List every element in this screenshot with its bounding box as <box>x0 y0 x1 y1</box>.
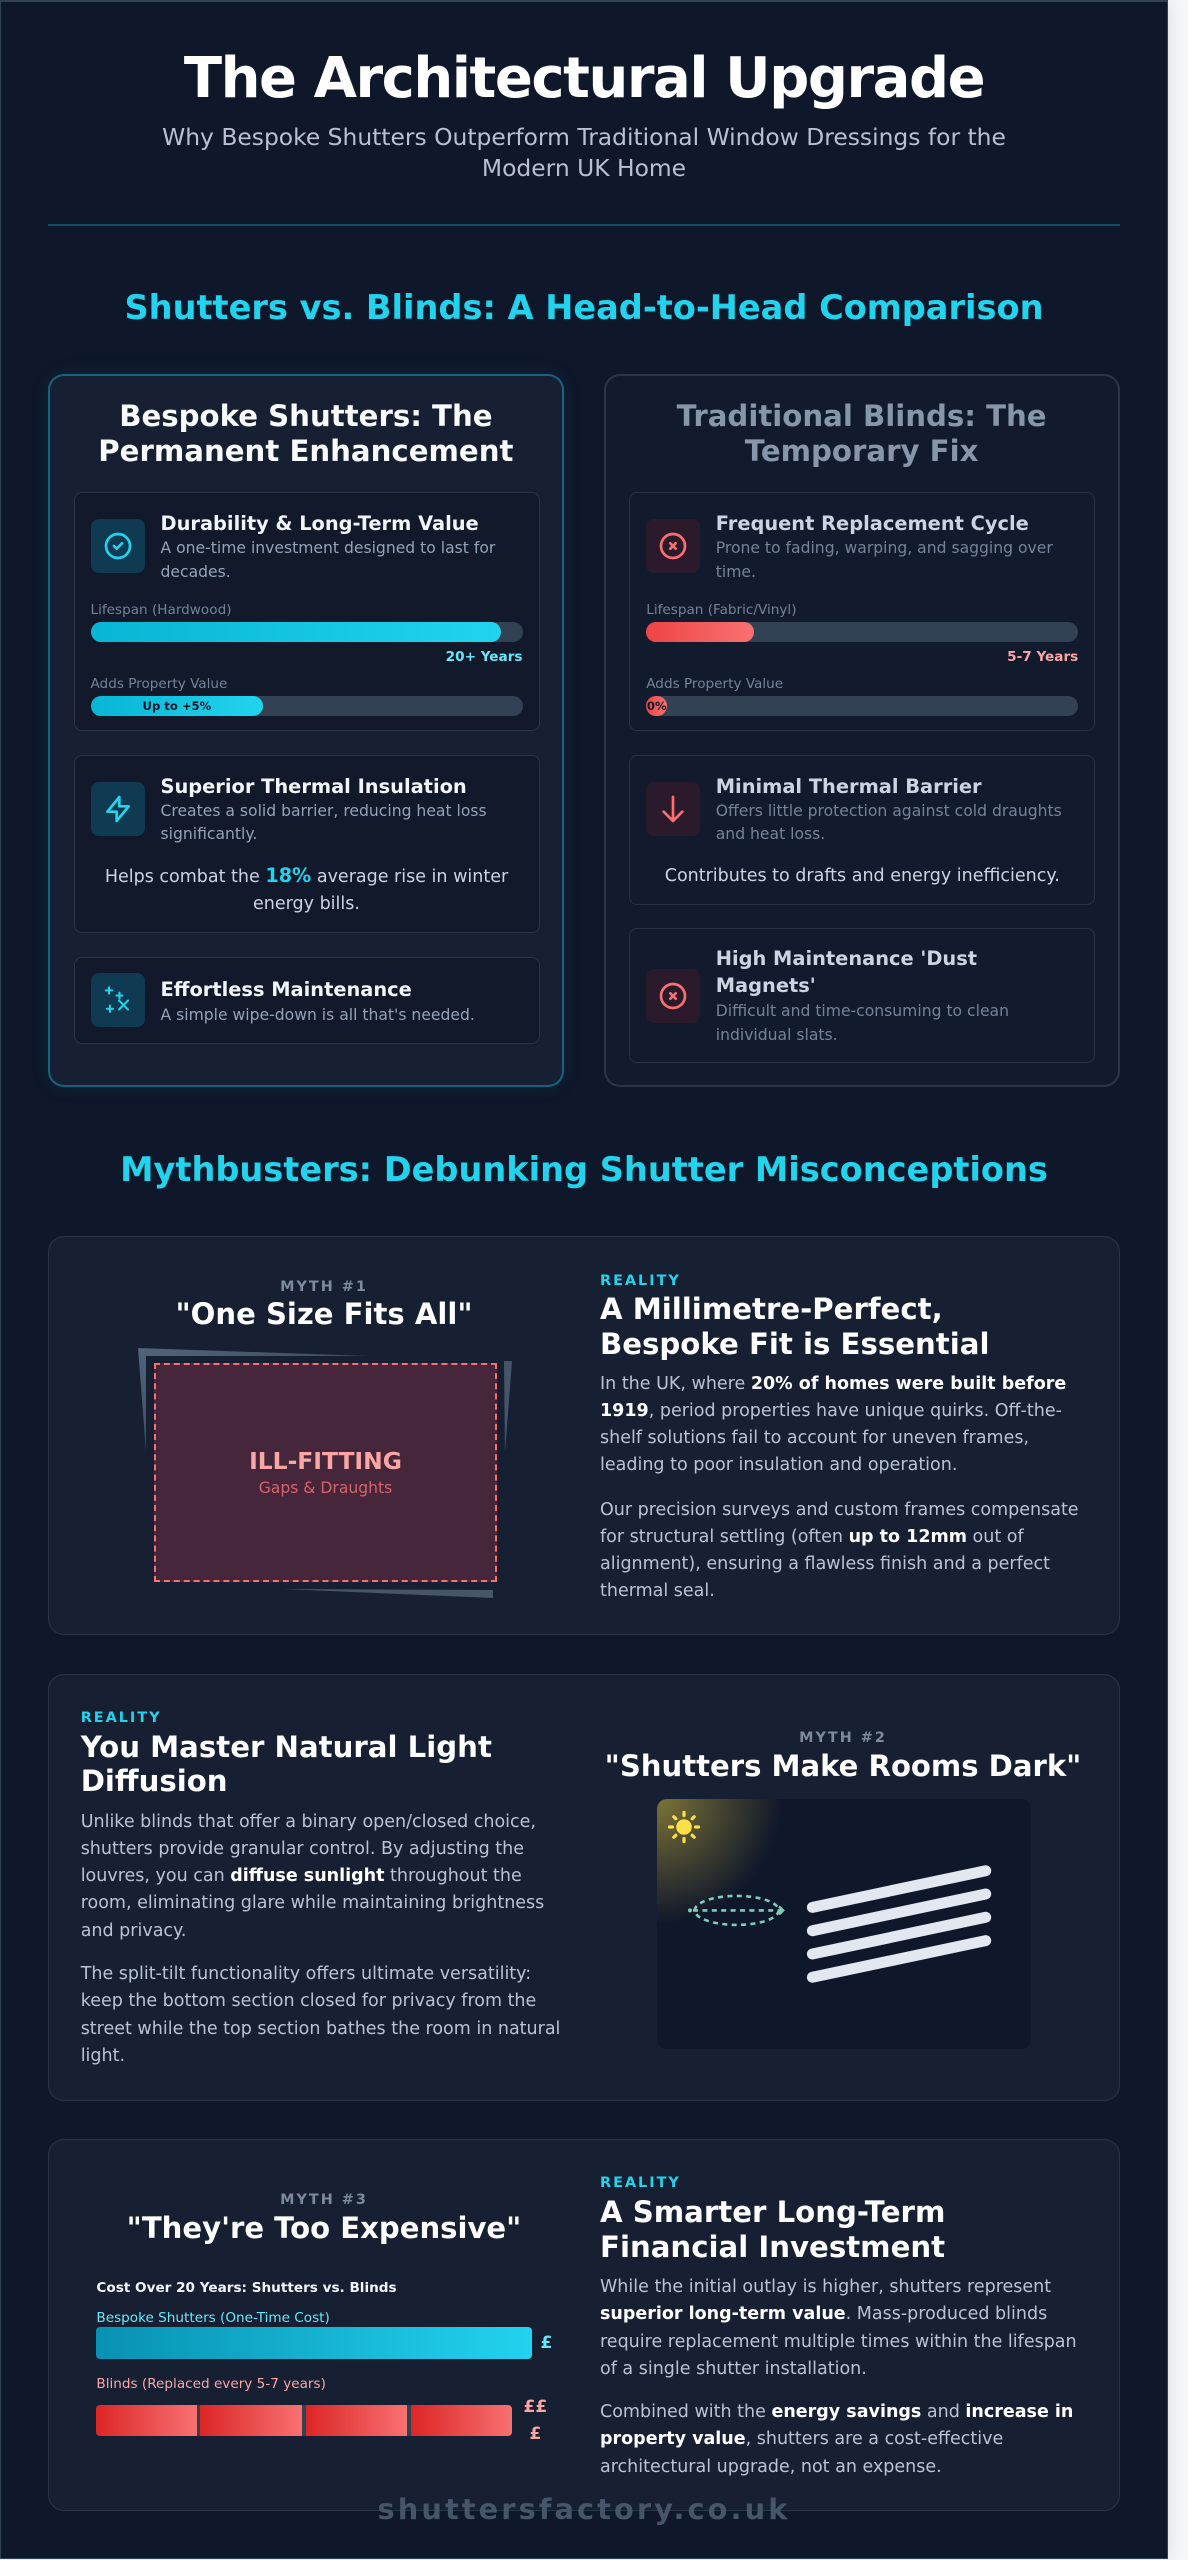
feature title: Magnets' <box>716 974 816 996</box>
panel: myth 2 <box>48 1674 1120 2101</box>
feature: high maintenance <box>629 928 1095 1063</box>
feature title <box>716 946 977 996</box>
panel heading: Temporary Fix <box>745 434 978 468</box>
paragraph: alignment), ensuring a flawless finish and a perfect <box>600 1554 1050 1574</box>
myth label: MYTH #2 <box>799 1730 887 1746</box>
bar: lifespan 25% <box>646 622 1078 642</box>
icon: x circle <box>646 969 700 1023</box>
heading: mythbusters section: Mythbusters: Debunking Shutter Misconceptions <box>120 1150 1048 1189</box>
feature description: individual slats. <box>716 1026 838 1044</box>
feature: thermal insulation <box>74 755 540 933</box>
paragraph: shelf solutions fail to account for uneven frames, <box>600 1428 1029 1448</box>
label: property value: Adds Property Value <box>646 676 783 692</box>
label: lifespan: Lifespan (Hardwood) <box>90 602 232 618</box>
feature description <box>716 802 1062 843</box>
paragraph: Unlike blinds that offer a binary open/closed choice, <box>81 1812 536 1832</box>
statement: Contributes to drafts and energy inefficiency. <box>665 866 1060 886</box>
feature description <box>160 802 487 843</box>
reality heading <box>80 1730 492 1798</box>
paragraph <box>600 2277 1077 2379</box>
myth heading <box>175 1278 472 1330</box>
reality heading: You Master Natural Light <box>81 1730 492 1764</box>
louvres <box>813 1871 986 1977</box>
feature description: Prone to fading, warping, and sagging over <box>716 539 1053 557</box>
feature description: time. <box>716 562 756 580</box>
feature title: Effortless Maintenance <box>160 978 412 1000</box>
paragraph <box>600 1374 1066 1475</box>
myth column <box>605 1730 1081 2049</box>
feature title: Minimal Thermal Barrier <box>716 775 982 798</box>
panel heading <box>98 399 513 468</box>
light rays <box>688 1896 783 1925</box>
label: gaps and draughts: Gaps & Draughts <box>259 1478 392 1496</box>
value: blinds cost: ££ <box>524 2396 547 2416</box>
reality text <box>600 2175 1077 2477</box>
paragraph: light. <box>81 2046 125 2066</box>
icon: lightning bolt <box>90 782 144 836</box>
reality heading: Bespoke Fit is Essential <box>600 1326 989 1360</box>
panel: traditional blinds <box>604 374 1120 1087</box>
bar: lifespan 95% <box>90 622 522 642</box>
icon: arrow down <box>646 782 700 836</box>
panel: myth 3 <box>48 2138 1120 2511</box>
reality heading: Diffusion <box>81 1764 228 1798</box>
feature description: A one-time investment designed to last for <box>160 539 495 557</box>
paragraph: for structural settling (often up to 12mm out of <box>600 1527 1024 1547</box>
feature description: and heat loss. <box>716 825 825 843</box>
icon: x circle <box>646 519 700 573</box>
paragraph: leading to poor insulation and operation. <box>600 1455 957 1475</box>
reality label: REALITY <box>81 1710 162 1726</box>
paragraph: shutters provide granular control. By adjusting the <box>81 1839 524 1859</box>
paragraph: In the UK, where 20% of homes were built before <box>600 1374 1066 1394</box>
paragraph: thermal seal. <box>600 1581 715 1601</box>
panel heading <box>676 399 1047 468</box>
reality label: REALITY <box>600 2175 681 2191</box>
paragraph: of a single shutter installation. <box>600 2359 867 2379</box>
statement <box>105 864 508 914</box>
paragraph: louvres, you can diffuse sunlight throughout the <box>81 1866 522 1886</box>
feature: durability <box>74 492 540 731</box>
paragraph <box>600 2402 1073 2477</box>
reality heading: Financial Investment <box>600 2230 945 2264</box>
feature: replacement cycle <box>629 492 1095 731</box>
feature title: Durability & Long-Term Value <box>160 512 479 534</box>
feature title: High Maintenance 'Dust <box>716 946 977 970</box>
feature description <box>716 1002 1009 1044</box>
bar: blinds in four segments <box>96 2405 512 2436</box>
value: 5-7 years: 5-7 Years <box>1007 648 1078 664</box>
feature description: A simple wipe-down is all that's needed. <box>160 1006 475 1024</box>
paragraph: The split-tilt functionality offers ultimate versatility: <box>81 1964 531 1984</box>
paragraph <box>600 1500 1079 1601</box>
panel: bespoke shutters <box>48 374 564 1087</box>
bar label: shutters: Bespoke Shutters (One-Time Cost) <box>96 2310 330 2326</box>
paragraph: superior long-term value. Mass-produced blinds <box>600 2304 1047 2324</box>
myth label: MYTH #1 <box>280 1278 368 1294</box>
paragraph <box>81 1812 544 1941</box>
feature description <box>160 539 496 580</box>
bar: shutters <box>96 2327 532 2359</box>
feature description <box>716 539 1053 580</box>
reality text <box>600 1272 1079 1601</box>
statement: Helps combat the 18% average rise in winter <box>105 864 508 887</box>
value: blinds cost <box>524 2396 547 2444</box>
myth label: MYTH #3 <box>280 2192 368 2208</box>
icon: sun <box>670 1812 699 1842</box>
subtitle: Modern UK Home <box>482 154 686 182</box>
feature description: Difficult and time-consuming to clean <box>716 1002 1009 1020</box>
icon: sparkles <box>90 973 144 1027</box>
paragraph: and privacy. <box>81 1921 186 1941</box>
paragraph: room, eliminating glare while maintaining brightness <box>81 1893 544 1913</box>
reality heading: A Millimetre-Perfect, <box>600 1292 943 1326</box>
myth quote: "They're Too Expensive" <box>127 2211 521 2245</box>
heading: comparison section: Shutters vs. Blinds: A Head-to-Head Comparison <box>124 288 1044 327</box>
paragraph <box>80 1964 560 2066</box>
reality text <box>80 1710 560 2066</box>
panel heading: Bespoke Shutters: The <box>119 399 493 433</box>
ill-fitting blind <box>154 1363 497 1582</box>
paragraph: While the initial outlay is higher, shutters represent <box>600 2277 1051 2297</box>
illustration: light through louvres <box>657 1799 1031 2049</box>
reality heading <box>600 1292 989 1360</box>
paragraph: property value, shutters are a cost-effective <box>600 2429 1003 2449</box>
chart title: Cost Over 20 Years: Shutters vs. Blinds <box>96 2280 397 2296</box>
panel heading: Permanent Enhancement <box>98 434 513 468</box>
watermark: shuttersfactory.co.uk <box>378 2492 790 2526</box>
myth heading <box>127 2192 521 2245</box>
panel heading: Traditional Blinds: The <box>677 399 1047 433</box>
paragraph: street while the top section bathes the room in natural <box>81 2019 560 2039</box>
paragraph: Combined with the energy savings and increase in <box>600 2402 1073 2422</box>
label: ill-fitting: ILL-FITTING <box>249 1446 402 1474</box>
feature description: significantly. <box>160 825 257 843</box>
reality label: REALITY <box>600 1272 681 1288</box>
statement: energy bills. <box>253 894 360 914</box>
label: lifespan: Lifespan (Fabric/Vinyl) <box>646 602 796 618</box>
feature description: decades. <box>160 562 231 580</box>
illustration: ill-fitting frame <box>138 1348 512 1598</box>
feature description: Offers little protection against cold draughts <box>716 802 1062 820</box>
value: shutters cost: £ <box>540 2333 552 2353</box>
subtitle: Why Bespoke Shutters Outperform Traditional Window Dressings for the <box>162 123 1006 151</box>
title: The Architectural Upgrade <box>184 46 984 110</box>
paragraph: Our precision surveys and custom frames compensate <box>600 1500 1079 1520</box>
label: property value: Adds Property Value <box>90 676 227 692</box>
panel: myth 1 <box>48 1236 1120 1635</box>
subtitle <box>162 123 1006 182</box>
paragraph: architectural upgrade, not an expense. <box>600 2457 942 2477</box>
bar label: blinds: Blinds (Replaced every 5-7 years) <box>96 2376 326 2392</box>
feature description: Creates a solid barrier, reducing heat loss <box>160 802 487 820</box>
bar: property value 0% <box>646 696 1078 716</box>
bar: property value 0%: 0% <box>647 699 667 713</box>
myth quote: "Shutters Make Rooms Dark" <box>605 1748 1081 1782</box>
myth quote: "One Size Fits All" <box>175 1296 472 1330</box>
icon: check circle <box>90 519 144 573</box>
paragraph: 1919, period properties have unique quirks. Off-the- <box>600 1401 1062 1421</box>
reality heading: A Smarter Long-Term <box>600 2195 945 2229</box>
value: 20+ years: 20+ Years <box>446 648 522 664</box>
chart: 20-year cost <box>96 2280 552 2444</box>
paragraph: require replacement multiple times within the lifespan <box>600 2332 1077 2352</box>
feature title: Frequent Replacement Cycle <box>716 512 1029 534</box>
value: blinds cost: £ <box>529 2424 541 2444</box>
bar: property value 40%: Up to +5% <box>143 699 211 713</box>
feature: thermal barrier <box>629 755 1095 905</box>
bar: property value 40% <box>90 696 522 716</box>
reality heading <box>600 2195 945 2264</box>
paragraph: keep the bottom section closed for privacy from the <box>81 1991 536 2011</box>
feature: maintenance <box>74 957 540 1044</box>
feature title: Superior Thermal Insulation <box>160 775 467 798</box>
